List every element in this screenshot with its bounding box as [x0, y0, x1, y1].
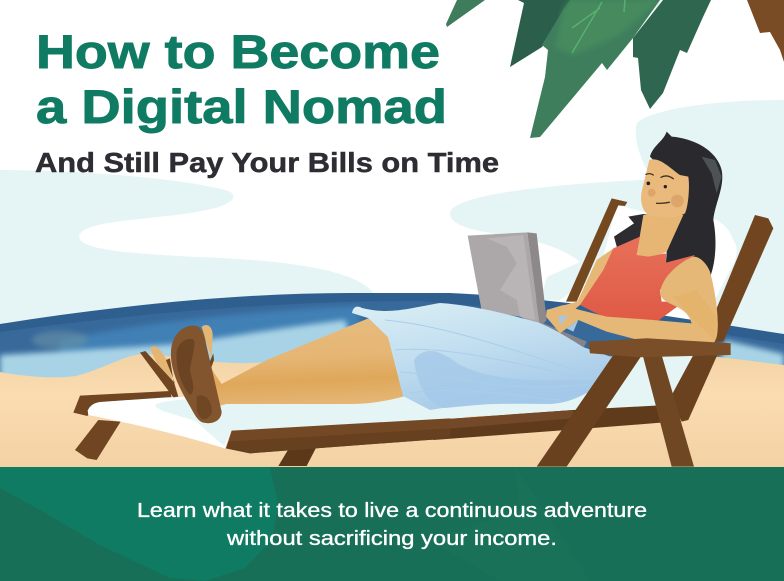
clouds [0, 100, 784, 345]
leaf: large [530, 0, 660, 138]
leaf: small [446, 0, 485, 27]
crossbar [433, 405, 673, 440]
laptop, woman, sarong [468, 132, 722, 348]
toes [150, 325, 213, 383]
sandal sole [171, 326, 222, 423]
strut: diagonal left [537, 355, 642, 467]
palm leaves [446, 0, 784, 138]
chair foot: front [278, 447, 317, 466]
leaf: dark left [510, 0, 575, 67]
leg [210, 318, 408, 407]
chair back [566, 198, 773, 342]
right rail [715, 215, 773, 342]
canvas [600, 205, 733, 293]
hair lock [614, 214, 667, 252]
footer mid shape [430, 467, 590, 581]
arm: near [546, 257, 718, 347]
neck and chest [637, 215, 683, 258]
footer light shape [0, 467, 278, 581]
strut: back [670, 355, 717, 422]
hair back [650, 132, 722, 277]
ocean [0, 293, 784, 385]
footer band [0, 467, 784, 581]
sarong [352, 303, 620, 410]
leaf: dark right [633, 0, 711, 109]
arm: far [547, 248, 613, 324]
tank top [580, 237, 695, 322]
laptop side [527, 232, 547, 327]
title: a Digital Nomad [36, 80, 447, 133]
laptop base [537, 322, 587, 348]
nose [648, 189, 656, 197]
chair foot: rear [75, 420, 121, 460]
lounge chair rear and towel [73, 387, 467, 466]
sand [0, 354, 784, 470]
chair frame: foot end [73, 391, 172, 416]
laptop screen [468, 232, 540, 327]
armrest [588, 338, 731, 357]
towel [88, 387, 467, 448]
towel under seat [440, 355, 693, 418]
eyebrows and mouth [646, 174, 673, 203]
fingers [558, 315, 578, 332]
hair highlight [702, 157, 722, 193]
eyes [646, 181, 667, 188]
title: How to Become [36, 25, 440, 78]
subtitle: And Still Pay Your Bills on Time [35, 147, 499, 178]
chair front [433, 338, 731, 467]
chair front rail [226, 418, 450, 453]
palm trunk [747, 0, 784, 62]
face [641, 159, 689, 218]
footer band: without sacrificing your income. [226, 527, 557, 550]
title [36, 25, 447, 133]
sandal strap [140, 351, 214, 397]
left rail [566, 198, 627, 302]
strut: diagonal right [643, 355, 694, 467]
footer text: Learn what it takes to live a continuous adventure [137, 499, 647, 522]
leg and sandal [140, 318, 408, 423]
cheek [671, 195, 684, 207]
